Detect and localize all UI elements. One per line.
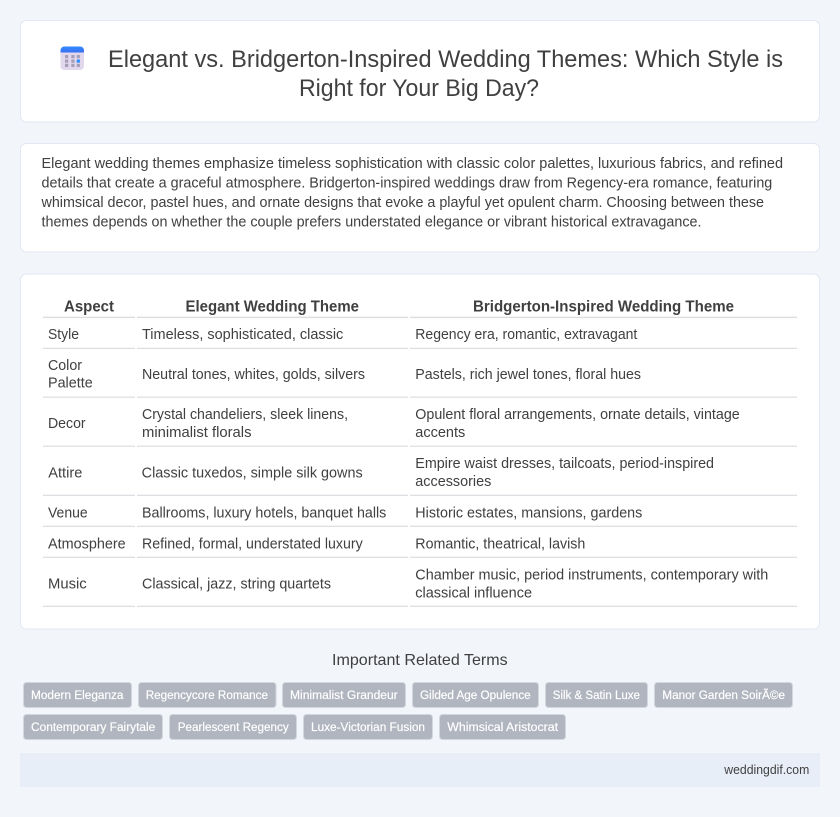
row: venue bbox=[48, 505, 642, 521]
row: attire bbox=[48, 456, 714, 490]
tag: Regencycore Romance: Regencycore Romance bbox=[146, 688, 268, 702]
row: decor: Crystal chandeliers, sleek linens, bbox=[142, 407, 348, 423]
tag: Luxe-Victorian Fusion bbox=[304, 714, 432, 740]
table header row: Elegant Wedding Theme bbox=[186, 299, 359, 316]
row: music: Chamber music, period instruments, contemporary with bbox=[415, 567, 768, 583]
icon: calendar bbox=[60, 46, 84, 70]
title: Elegant vs. Bridgerton-Inspired Wedding Themes: Which Style is bbox=[108, 46, 783, 73]
row: music bbox=[48, 567, 768, 601]
heading: important related terms: Important Related Terms bbox=[332, 652, 508, 669]
row: music: classical influence bbox=[415, 585, 532, 601]
tag: Whimsical Aristocrat: Whimsical Aristocrat bbox=[447, 720, 559, 734]
tag: Regencycore Romance bbox=[138, 682, 276, 708]
row: color palette bbox=[48, 358, 641, 392]
row: atmosphere: Refined, formal, understated luxury bbox=[142, 536, 363, 552]
tag: Pearlescent Regency bbox=[170, 714, 296, 740]
row: music: Music bbox=[48, 576, 87, 592]
text block: intro paragraph: themes depends on whether the couple prefers understated elegance or vibrant historical extravagance. bbox=[42, 214, 702, 230]
row: venue: Ballrooms, luxury hotels, banquet halls bbox=[142, 505, 386, 521]
tag list: related terms bbox=[24, 682, 792, 740]
row: decor: minimalist florals bbox=[142, 425, 252, 441]
panel: title header bbox=[20, 20, 820, 122]
row: decor: Decor bbox=[48, 416, 86, 432]
row: venue: Historic estates, mansions, gardens bbox=[415, 505, 642, 521]
text block: intro paragraph: Elegant wedding themes emphasize timeless sophistication with classic color palettes, luxurious fabrics, and refined bbox=[42, 156, 783, 172]
row: color palette: Color bbox=[48, 358, 82, 374]
row: color palette: Neutral tones, whites, golds, silvers bbox=[142, 367, 365, 383]
tag: Gilded Age Opulence: Gilded Age Opulence bbox=[420, 688, 531, 702]
row: atmosphere bbox=[48, 536, 585, 552]
row: decor: Opulent floral arrangements, ornate details, vintage bbox=[415, 407, 740, 423]
row: style: Style bbox=[48, 327, 79, 343]
row: color palette: Pastels, rich jewel tones, floral hues bbox=[415, 367, 641, 383]
panel: introduction bbox=[20, 144, 820, 252]
row: music: Classical, jazz, string quartets bbox=[142, 576, 331, 592]
row: style: Timeless, sophisticated, classic bbox=[142, 327, 343, 343]
row: atmosphere: Atmosphere bbox=[48, 536, 126, 552]
row: attire: Empire waist dresses, tailcoats, period-inspired bbox=[415, 456, 714, 472]
tag: Pearlescent Regency: Pearlescent Regency bbox=[178, 720, 289, 734]
footer: weddingdif.com bbox=[723, 762, 809, 777]
row: atmosphere: Romantic, theatrical, lavish bbox=[415, 536, 585, 552]
tag: Gilded Age Opulence bbox=[412, 682, 538, 708]
tag: Whimsical Aristocrat bbox=[440, 714, 566, 740]
panel: comparison table bbox=[20, 274, 820, 629]
tag: Contemporary Fairytale: Contemporary Fairytale bbox=[31, 720, 155, 734]
tag: Manor Garden Soiree: Manor Garden SoirÃ©e bbox=[662, 688, 785, 702]
footer bbox=[20, 753, 820, 787]
table header row: Bridgerton-Inspired Wedding Theme bbox=[473, 299, 734, 316]
text block: intro paragraph bbox=[41, 156, 783, 230]
tag: Minimalist Grandeur: Minimalist Grandeur bbox=[290, 688, 398, 702]
table header row: Aspect bbox=[64, 299, 114, 316]
tag: Manor Garden Soiree bbox=[654, 682, 792, 708]
tag: Silk & Satin Luxe bbox=[546, 682, 648, 708]
title bbox=[108, 46, 783, 102]
row: decor: accents bbox=[415, 425, 465, 441]
text block: intro paragraph: details that create a graceful atmosphere. Bridgerton-inspired weddings draw from Regency-era romance, featuring bbox=[42, 176, 772, 192]
title: Right for Your Big Day? bbox=[299, 75, 539, 102]
tag: Silk & Satin Luxe: Silk & Satin Luxe bbox=[553, 688, 640, 702]
row: attire: accessories bbox=[415, 474, 491, 490]
table header row bbox=[64, 299, 734, 316]
row: venue: Venue bbox=[48, 505, 88, 521]
row: decor bbox=[48, 407, 740, 441]
row: attire: Attire bbox=[48, 465, 82, 481]
tag: Contemporary Fairytale bbox=[24, 714, 162, 740]
tag: Modern Eleganza bbox=[24, 682, 132, 708]
row: style bbox=[48, 327, 637, 343]
row: attire: Classic tuxedos, simple silk gowns bbox=[142, 465, 363, 481]
row: style: Regency era, romantic, extravagant bbox=[415, 327, 637, 343]
tag: Minimalist Grandeur bbox=[282, 682, 406, 708]
tag: Modern Eleganza: Modern Eleganza bbox=[31, 688, 124, 702]
text block: intro paragraph: whimsical decor, pastel hues, and ornate designs that evoke a playful yet opulent charm. Choosing between these bbox=[41, 195, 764, 211]
row: color palette: Palette bbox=[48, 376, 93, 392]
tag: Luxe-Victorian Fusion: Luxe-Victorian Fusion bbox=[311, 720, 425, 734]
